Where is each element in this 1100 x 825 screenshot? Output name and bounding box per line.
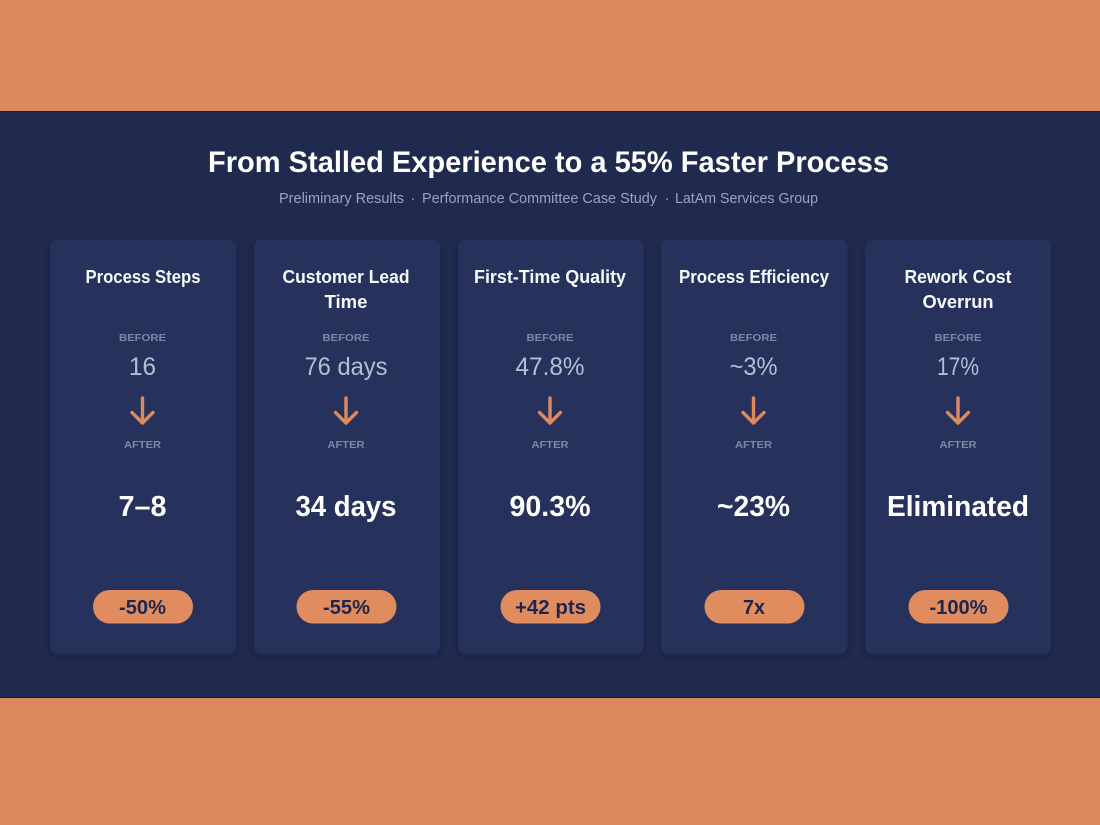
badge: -100% [930,597,988,619]
after label: AFTER [124,439,161,451]
after value: 34 days [296,491,396,523]
before label: BEFORE [119,332,166,344]
subtitle: LatAm Services Group [675,190,818,207]
arrow [540,398,560,423]
badge: -55% [323,597,370,619]
panel: first-time quality [458,240,644,653]
before label: BEFORE [526,332,574,344]
before label: BEFORE [730,332,777,344]
subtitle: · [664,190,670,207]
panel: process efficiency [661,240,848,653]
before label: BEFORE [322,332,370,344]
after label: AFTER [532,439,569,451]
heading [904,267,1012,312]
before value: 16 [129,353,156,381]
after value: 90.3% [510,491,591,523]
subtitle: · [410,190,416,207]
badge: 7x [743,597,765,619]
panel: customer lead time [254,240,440,653]
panel: rework cost overrun [865,240,1051,653]
heading [282,267,410,312]
after value: ~23% [717,491,790,523]
heading: Overrun [922,292,994,312]
before value: 76 days [304,353,388,381]
panel: process steps [50,240,236,653]
badge: +42 pts [515,597,586,619]
title: From Stalled Experience to a 55% Faster Process [208,146,889,179]
heading: Customer Lead [282,267,410,287]
badge [704,590,804,624]
arrow [336,398,356,423]
subtitle [279,190,818,207]
arrow [132,398,153,423]
before value: ~3% [730,353,778,381]
after label: AFTER [940,439,977,451]
arrow [743,398,764,423]
arrow [948,398,968,423]
after label: AFTER [328,439,365,451]
after value: 7–8 [118,491,166,523]
before label: BEFORE [934,332,982,344]
subtitle: Preliminary Results [279,190,404,207]
heading: Time [324,292,368,312]
subtitle: Performance Committee Case Study [422,190,657,207]
before value: 47.8% [516,353,584,381]
badge [500,590,600,624]
after value: Eliminated [887,491,1029,523]
heading: Process Steps [86,267,200,287]
badge: -50% [119,597,166,619]
heading: First-Time Quality [474,267,626,287]
badge [908,590,1008,624]
dark band [0,112,1100,698]
badge [93,590,193,624]
before value: 17% [937,353,979,381]
after label: AFTER [735,439,772,451]
heading: Process Efficiency [679,267,829,287]
badge [296,590,396,624]
heading: Rework Cost [904,267,1012,287]
